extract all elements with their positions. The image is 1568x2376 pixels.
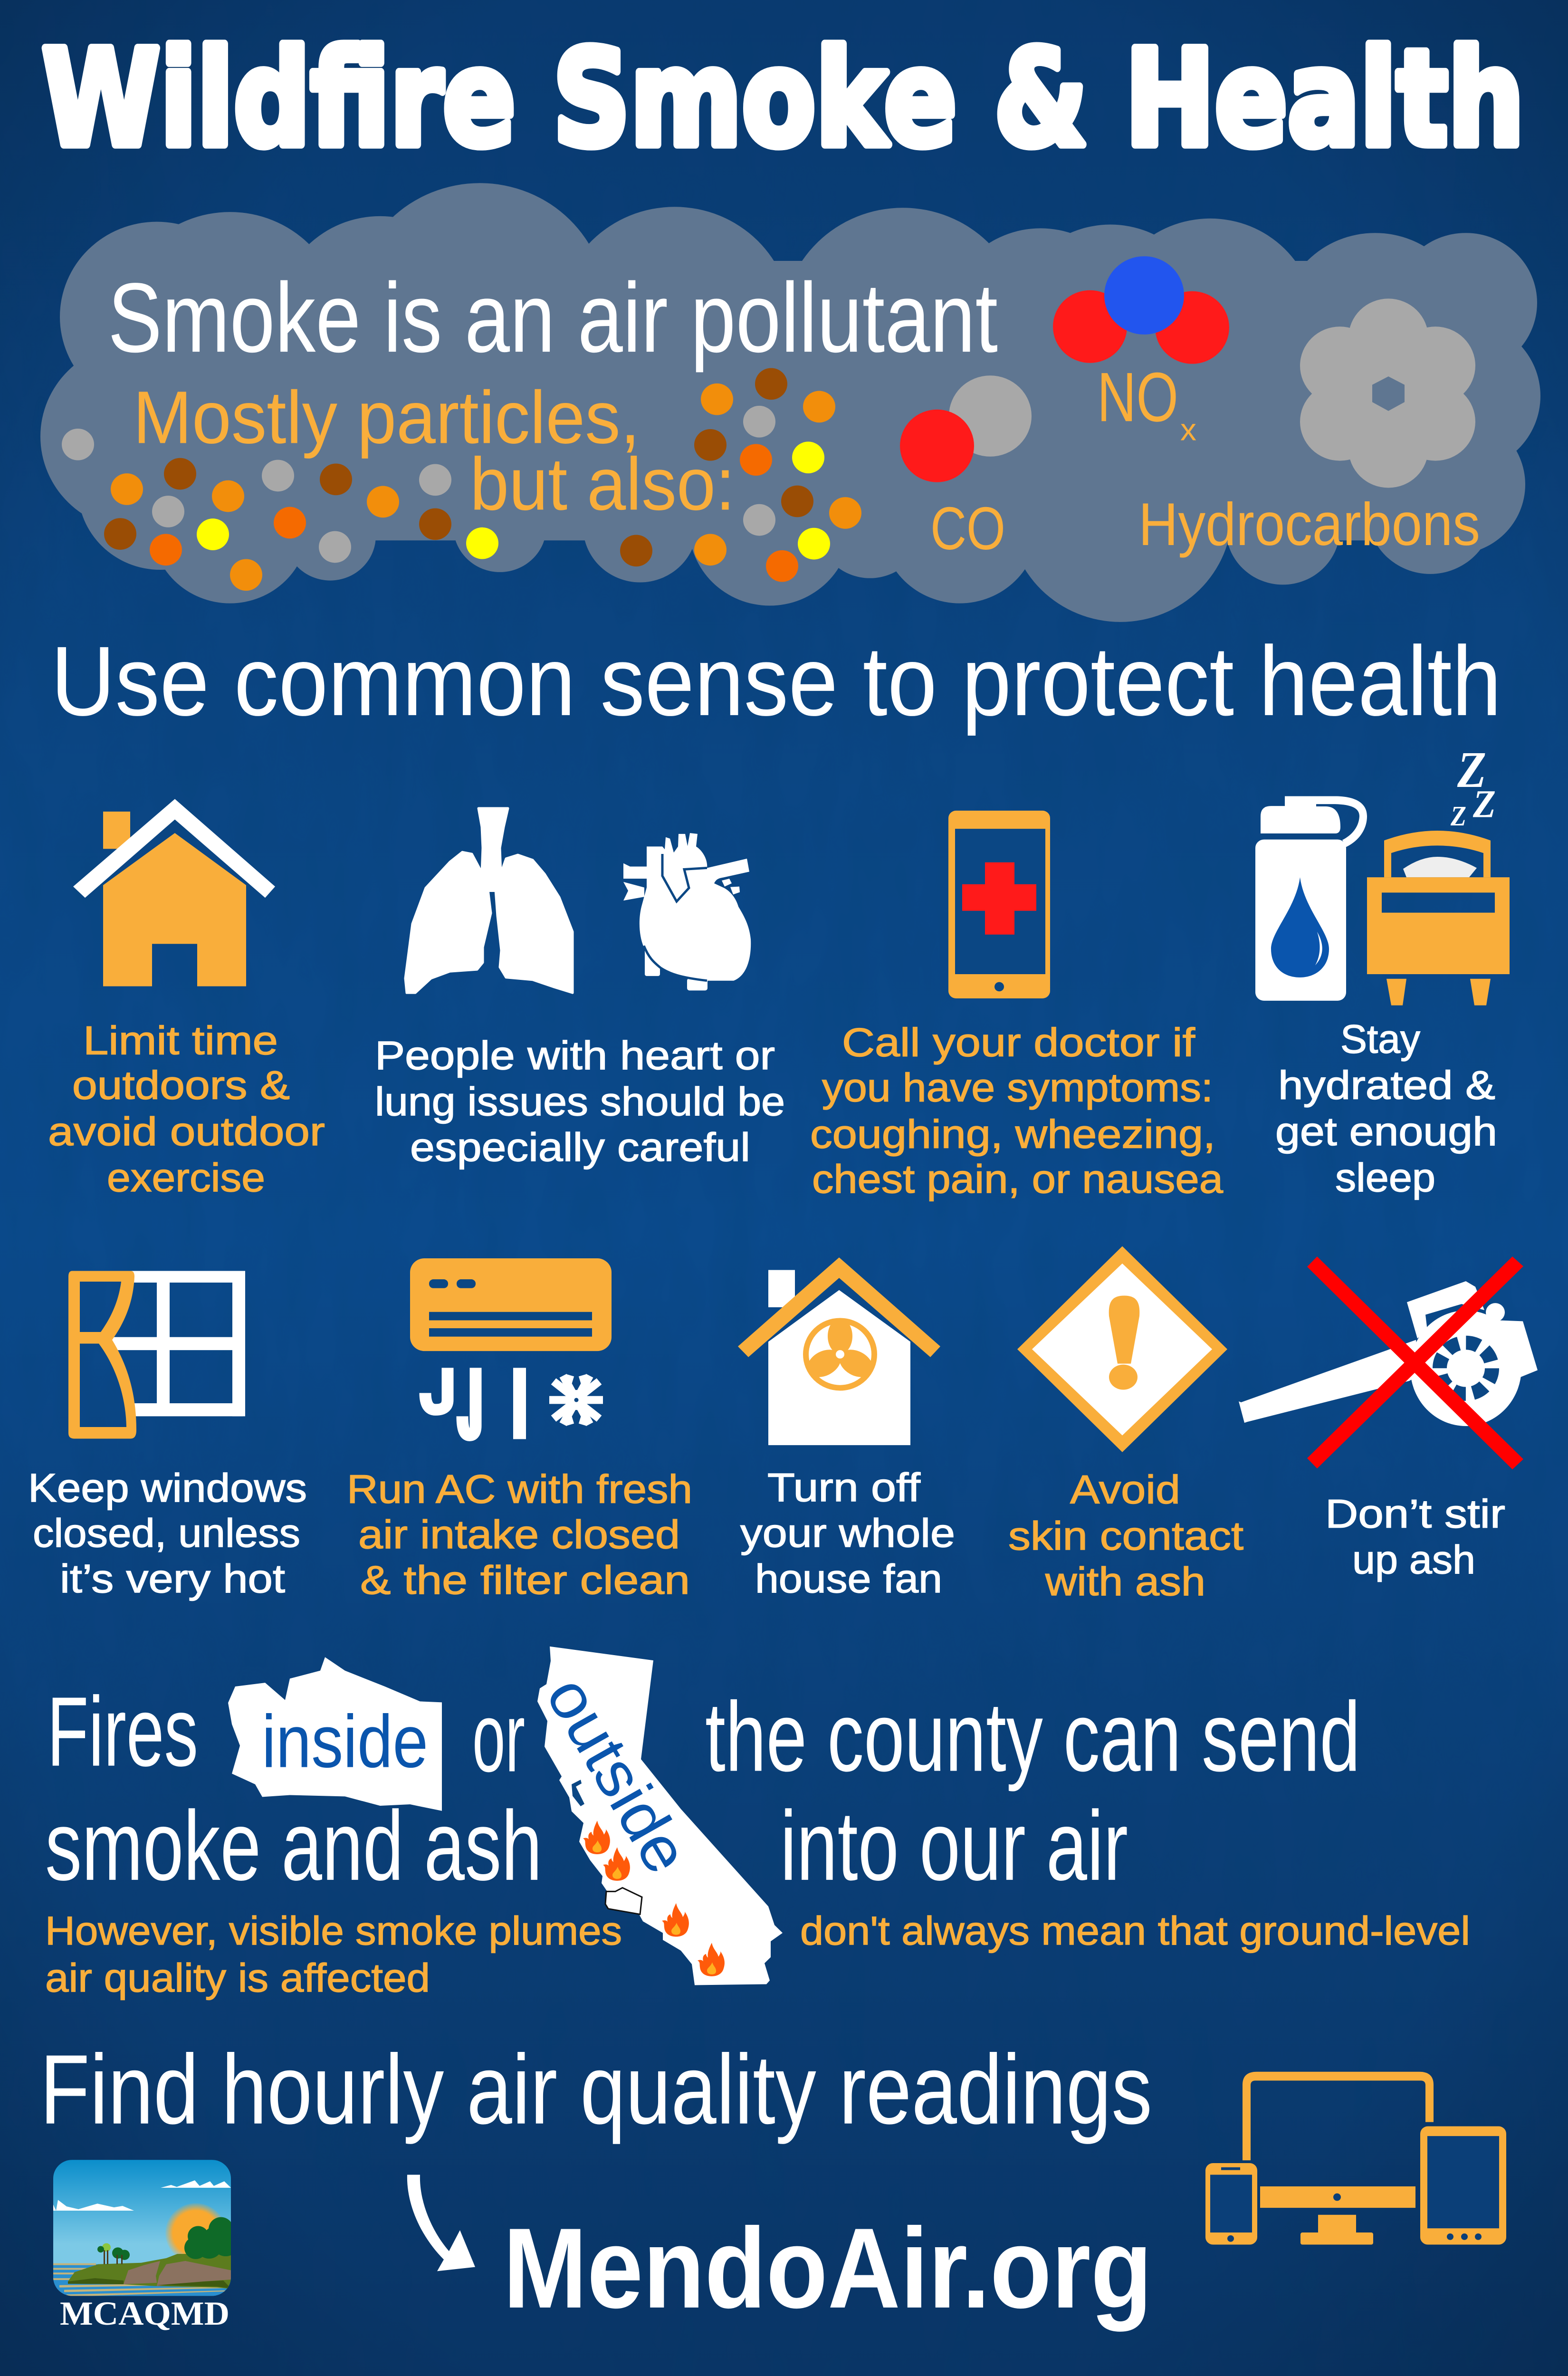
- text: keep windows closed: Keep windows: [28, 1466, 307, 1511]
- icon: leaf blower crossed out: [1239, 1256, 1538, 1469]
- panel: smoke cloud: [40, 183, 1540, 622]
- monitor: [1243, 2072, 1434, 2245]
- text: limit time: exercise: [107, 1156, 265, 1200]
- text: or: or: [472, 1682, 525, 1792]
- text: turn off fan: Turn off: [767, 1466, 920, 1510]
- logo: mcaqmd: [53, 2160, 239, 2332]
- text: limit time: outdoors &: [72, 1063, 290, 1108]
- text: call your doctor: Call your doctor if: [842, 1020, 1195, 1065]
- text: avoid skin contact: [1008, 1467, 1243, 1604]
- icon: snowflake: [549, 1375, 603, 1425]
- text: avoid skin contact: with ash: [1045, 1560, 1205, 1604]
- text: turn off fan: [740, 1466, 955, 1601]
- icon: sleeping zs: Z: [1472, 782, 1496, 825]
- shape: county map with inside label: inside: [262, 1700, 428, 1783]
- phone: [1205, 2163, 1257, 2245]
- icon: air conditioner: [410, 1258, 612, 1439]
- red x: [1307, 1256, 1523, 1469]
- text: limit time: Limit time: [83, 1018, 278, 1063]
- molecule: hydrocarbons: [1300, 298, 1475, 488]
- text: keep windows closed: it’s very hot: [60, 1557, 285, 1601]
- text: stay hydrated: [1275, 1017, 1497, 1200]
- icon: warning diamond: [1017, 1246, 1227, 1452]
- link: mendoair.org: MendoAir.org: [503, 2204, 1152, 2332]
- text: heart or lung issues: People with heart or: [375, 1034, 775, 1078]
- icon: heart: [623, 833, 751, 990]
- label: hydrocarbons: Hydrocarbons: [1138, 490, 1480, 558]
- icon: house: [73, 799, 275, 986]
- text: smoke and ash: smoke and ash: [45, 1791, 542, 1901]
- text: turn off fan: your whole: [740, 1511, 955, 1556]
- cloud shape: [40, 183, 1540, 622]
- text: dont stir up ash: [1325, 1492, 1505, 1582]
- text: outside: outside: [533, 1665, 703, 1885]
- text: avoid skin contact: skin contact: [1008, 1514, 1243, 1559]
- text: run ac: Run AC with fresh: [347, 1467, 692, 1512]
- icon: water bottle: [1255, 796, 1367, 1001]
- text: heart or lung issues: especially careful: [410, 1125, 750, 1170]
- molecule: CO: [900, 375, 1032, 482]
- text: stay hydrated: get enough: [1275, 1110, 1497, 1154]
- heading: find hourly readings: Find hourly air quality readings: [40, 2035, 1152, 2145]
- label: CO: CO: [930, 495, 1005, 563]
- icon: sleeping zs: [1450, 741, 1496, 832]
- shape: county map with inside label: [228, 1657, 442, 1811]
- heading: but also: but also:: [470, 442, 735, 526]
- text: fires: Fires: [47, 1677, 198, 1787]
- icon: window with curtain: [68, 1271, 245, 1438]
- tablet: [1420, 2127, 1506, 2245]
- icon: house with fan: [738, 1257, 940, 1445]
- icon: sleeping zs: Z: [1457, 741, 1486, 798]
- icon: devices: [1205, 2072, 1506, 2245]
- icon: sleeping zs: Z: [1450, 801, 1466, 832]
- text: call your doctor: coughing, wheezing,: [810, 1112, 1215, 1157]
- text: into our air: into our air: [780, 1791, 1128, 1901]
- icon: lungs: [405, 808, 573, 993]
- san francisco bay: [572, 1780, 584, 1806]
- text: turn off fan: house fan: [755, 1557, 942, 1601]
- label: NOx: x: [1180, 412, 1196, 447]
- icon: phone with medical cross: [948, 811, 1050, 998]
- text: visible smoke plumes note: don't always mean that ground-level: [800, 1909, 1470, 1954]
- text: visible smoke plumes note: [45, 1909, 1470, 2001]
- county outline: [605, 1888, 642, 1914]
- arrow: [407, 2175, 475, 2271]
- heading: mostly particles: Mostly particles,: [133, 376, 640, 459]
- leaf blower: [1239, 1281, 1538, 1426]
- text: dont stir up ash: Don’t stir: [1325, 1492, 1505, 1537]
- text: heart or lung issues: [375, 1034, 785, 1170]
- logo image: [53, 2160, 239, 2297]
- heading: smoke is an air pollutant: Smoke is an air pollutant: [108, 263, 998, 373]
- text: call your doctor: chest pain, or nausea: [812, 1157, 1224, 1202]
- fire icons: [583, 1820, 725, 1976]
- text: run ac: [347, 1467, 692, 1603]
- text: call your doctor: [810, 1020, 1224, 1202]
- text: run ac: & the filter clean: [360, 1558, 690, 1603]
- text: call your doctor: you have symptoms:: [822, 1065, 1213, 1110]
- icon: fan: [802, 1319, 878, 1388]
- molecule: NOx: [1053, 256, 1229, 364]
- logo text: MCAQMD: [60, 2295, 229, 2332]
- text: visible smoke plumes note: However, visible smoke plumes: [45, 1909, 622, 1954]
- text: run ac: air intake closed: [358, 1513, 680, 1557]
- text: avoid skin contact: Avoid: [1070, 1467, 1180, 1513]
- text: stay hydrated: sleep: [1335, 1156, 1435, 1200]
- text: visible smoke plumes note: air quality is affected: [45, 1956, 430, 2001]
- shape: california map: [533, 1647, 783, 1985]
- text: keep windows closed: closed, unless: [33, 1511, 300, 1556]
- text: stay hydrated: hydrated &: [1278, 1063, 1495, 1108]
- label: NOx: NO: [1097, 359, 1178, 436]
- text: limit time: [48, 1018, 325, 1200]
- text: heart or lung issues: lung issues should be: [375, 1080, 785, 1124]
- particles: [62, 368, 861, 591]
- text: stay hydrated: Stay: [1340, 1017, 1420, 1062]
- text: dont stir up ash: up ash: [1352, 1538, 1475, 1582]
- text: keep windows closed: [28, 1466, 307, 1601]
- text: limit time: avoid outdoor: [48, 1110, 325, 1154]
- icon: bed: [1367, 831, 1510, 1006]
